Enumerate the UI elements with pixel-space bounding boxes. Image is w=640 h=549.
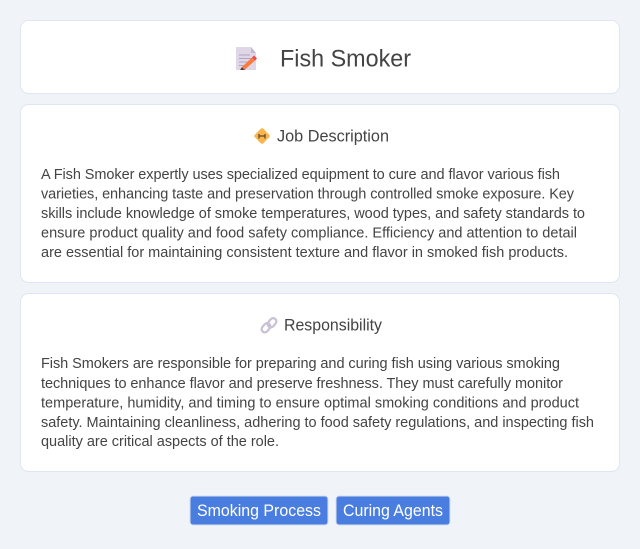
icon: memo with pencil [236, 47, 257, 70]
text block: job description: ensure product quality and food safety compliance. Efficiency and attention to detail [41, 226, 577, 242]
text block: responsibility: quality are critical aspects of the role. [41, 434, 279, 450]
text block: job description: are essential for maintaining consistent texture and flavor in smoked fish products. [41, 245, 568, 261]
text block: job description: A Fish Smoker expertly uses specialized equipment to cure and flavor various fish [41, 167, 560, 183]
text block: job description [41, 167, 585, 261]
button: curing agents [336, 496, 450, 525]
text block: responsibility: temperature, humidity, and timing to ensure optimal smoking conditions and product [41, 396, 579, 412]
text block: responsibility: Fish Smokers are responsible for preparing and curing fish using various smoking [41, 356, 560, 372]
text block: responsibility: techniques to enhance flavor and preserve freshness. They must carefully monitor [41, 376, 563, 392]
panel: title card [20, 20, 620, 94]
title: Fish Smoker [280, 46, 411, 72]
text block: job description: skills include knowledge of smoke temperatures, wood types, and safety standards to [41, 206, 585, 222]
heading: job description: Job Description [277, 128, 389, 146]
button: curing agents: Curing Agents [343, 502, 443, 520]
heading: responsibility: Responsibility [284, 316, 383, 334]
text block: responsibility: safety. Maintaining cleanliness, adhering to food safety regulations, and inspecting fish [41, 415, 594, 431]
text block: responsibility [41, 356, 594, 450]
panel: responsibility [20, 294, 620, 472]
button: smoking process: Smoking Process [197, 502, 321, 520]
button: smoking process [190, 496, 328, 525]
panel: job description [20, 104, 620, 282]
icon: construction diamond [254, 128, 270, 144]
text block: job description: varieties, enhancing taste and preservation through controlled smoke exposure. Key [41, 186, 575, 202]
icon: link [260, 317, 278, 334]
